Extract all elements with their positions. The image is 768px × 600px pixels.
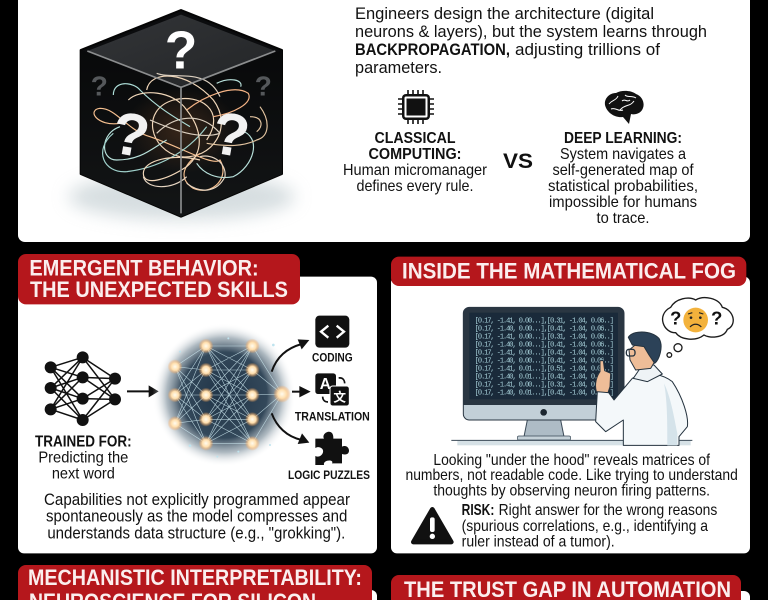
text block: classical computing: Human micromanager bbox=[343, 162, 488, 179]
illustration: scientist pointing at screen bbox=[596, 332, 688, 445]
text block: risk bbox=[462, 502, 717, 551]
heading: mechanistic interpretability: MECHANISTIC INTERPRETABILITY: bbox=[28, 565, 362, 590]
text block: classical computing bbox=[343, 130, 488, 195]
text block: deep learning: DEEP LEARNING: bbox=[564, 130, 682, 147]
panel: emergent behavior bbox=[18, 254, 377, 553]
icon: translation: A bbox=[320, 376, 331, 393]
panel: mechanistic interpretability bbox=[18, 565, 377, 600]
icon: black box cube with tangled wires: ? bbox=[165, 21, 197, 80]
text block: backpropagation intro: Engineers design the architecture (digital bbox=[355, 4, 654, 23]
icon: black box cube with tangled wires: ? bbox=[207, 99, 255, 171]
panel: trust gap in automation bbox=[391, 575, 750, 600]
text block: risk: Right answer for the wrong reasons bbox=[499, 502, 717, 519]
illustration: computer monitor with matrices: [0.17, -1.40, 0.01...],[0.41, -1.04, 0.06..] bbox=[475, 389, 614, 397]
icon: black box cube with tangled wires: ? bbox=[91, 71, 108, 102]
icon: warning triangle bbox=[413, 509, 451, 542]
icon: translation: 文 bbox=[333, 389, 346, 404]
illustration: confused thought bubble: ? bbox=[670, 307, 681, 328]
text block: classical computing: CLASSICAL bbox=[374, 130, 456, 147]
text block: risk: RISK: bbox=[462, 502, 494, 519]
text block: trained for bbox=[35, 434, 132, 483]
text block: classical computing: defines every rule. bbox=[356, 178, 474, 195]
arrow: to glowing network bbox=[127, 385, 159, 397]
illustration: glowing deep network bbox=[152, 323, 296, 467]
icon: coding bbox=[315, 316, 349, 348]
illustration: computer monitor with matrices: [0.17, -1.40, 0.00...],[0.41, -1.04, 0.06..] bbox=[475, 357, 614, 365]
arrows: to skills bbox=[272, 339, 311, 444]
text block: emergent capabilities bbox=[44, 491, 351, 543]
illustration: confused thought bubble: ? bbox=[711, 307, 722, 328]
icon: translation bbox=[315, 373, 349, 406]
text block: risk: (spurious correlations, e.g., identifying a bbox=[462, 518, 708, 535]
text block: deep learning: System navigates a bbox=[560, 146, 686, 163]
heading: mechanistic interpretability bbox=[18, 565, 372, 600]
illustration: computer monitor with matrices bbox=[451, 307, 692, 445]
illustration: computer monitor with matrices: [0.17, -1.41, 0.01...],[0.51, -1.04, 0.06..] bbox=[475, 365, 614, 373]
text block: trained for: next word bbox=[52, 466, 115, 483]
text block: deep learning: impossible for humans bbox=[549, 194, 697, 211]
label: logic puzzles: LOGIC PUZZLES bbox=[288, 468, 370, 482]
label: coding: CODING bbox=[312, 351, 353, 365]
text block: backpropagation intro: adjusting trillions of bbox=[515, 40, 660, 59]
icon: computer chip bbox=[398, 90, 434, 124]
text block: deep learning: to trace. bbox=[596, 210, 650, 227]
text block: backpropagation intro: BACKPROPAGATION, bbox=[355, 40, 510, 59]
illustration: computer monitor with matrices: [0.17, -1.40, 0.00...],[0.41, -1.04, 0.06..] bbox=[475, 341, 614, 349]
panel: inside the mathematical fog bbox=[391, 257, 750, 553]
text block: deep learning: statistical probabilities, bbox=[548, 178, 698, 195]
text block: emergent capabilities: spontaneously as the model compresses and bbox=[46, 508, 347, 526]
heading: emergent behavior: THE UNEXPECTED SKILLS bbox=[30, 277, 288, 302]
illustration: computer monitor with matrices: [0.17, -1.41, 0.00...],[0.31, -1.04, 0.06..] bbox=[475, 381, 614, 389]
illustration: computer monitor with matrices: [0.17, -1.40, 0.01...],[0.41, -1.04, 0.06..] bbox=[475, 373, 614, 381]
label: translation: TRANSLATION bbox=[295, 410, 370, 424]
text block: under the hood bbox=[405, 452, 738, 499]
text block: trained for: TRAINED FOR: bbox=[35, 434, 132, 451]
heading: emergent behavior bbox=[18, 254, 300, 304]
text block: risk: ruler instead of a tumor). bbox=[462, 534, 615, 551]
text block: trained for: Predicting the bbox=[38, 449, 129, 466]
text block: deep learning: self-generated map of bbox=[552, 162, 694, 179]
heading: emergent behavior: EMERGENT BEHAVIOR: bbox=[29, 255, 259, 280]
icon: black box cube with tangled wires: ? bbox=[107, 99, 155, 171]
text block: deep learning bbox=[548, 130, 698, 227]
label: versus: VS bbox=[503, 150, 533, 173]
illustration: computer monitor with matrices: [0.17, -1.40, 0.00...],[0.41, -1.04, 0.06..] bbox=[475, 325, 614, 333]
icon: brain bbox=[605, 91, 644, 124]
heading: inside the mathematical fog: INSIDE THE MATHEMATICAL FOG bbox=[402, 258, 736, 283]
text block: backpropagation intro bbox=[355, 4, 707, 77]
text block: under the hood: thoughts by observing neuron firing patterns. bbox=[433, 482, 710, 499]
text block: under the hood: Looking "under the hood" reveals matrices of bbox=[433, 452, 711, 469]
text block: backpropagation intro: neurons & layers), but the system learns through bbox=[355, 22, 707, 41]
text block: emergent capabilities: understands data structure (e.g., "grokking"). bbox=[47, 525, 345, 543]
text block: emergent capabilities: Capabilities not explicitly programmed appear bbox=[44, 491, 351, 509]
illustration: computer monitor with matrices: [0.17, -1.41, 0.00...],[0.31, -1.04, 0.06..] bbox=[475, 317, 614, 325]
illustration: computer monitor with matrices: [0.17, -1.41, 0.00...],[0.31, -1.04, 0.06..] bbox=[475, 333, 614, 341]
illustration: confused thought bubble bbox=[663, 298, 733, 357]
text block: backpropagation intro: parameters. bbox=[355, 58, 442, 77]
icon: simple neural network bbox=[45, 351, 121, 426]
icon: black box cube with tangled wires bbox=[68, 10, 295, 220]
illustration: computer monitor with matrices: [0.17, -1.41, 0.00...],[0.41, -1.04, 0.06..] bbox=[475, 349, 614, 357]
text block: classical computing: COMPUTING: bbox=[368, 146, 462, 163]
icon: black box cube with tangled wires: ? bbox=[255, 71, 272, 102]
panel: black box overview bbox=[18, 0, 750, 242]
icon: puzzle piece bbox=[315, 432, 349, 465]
